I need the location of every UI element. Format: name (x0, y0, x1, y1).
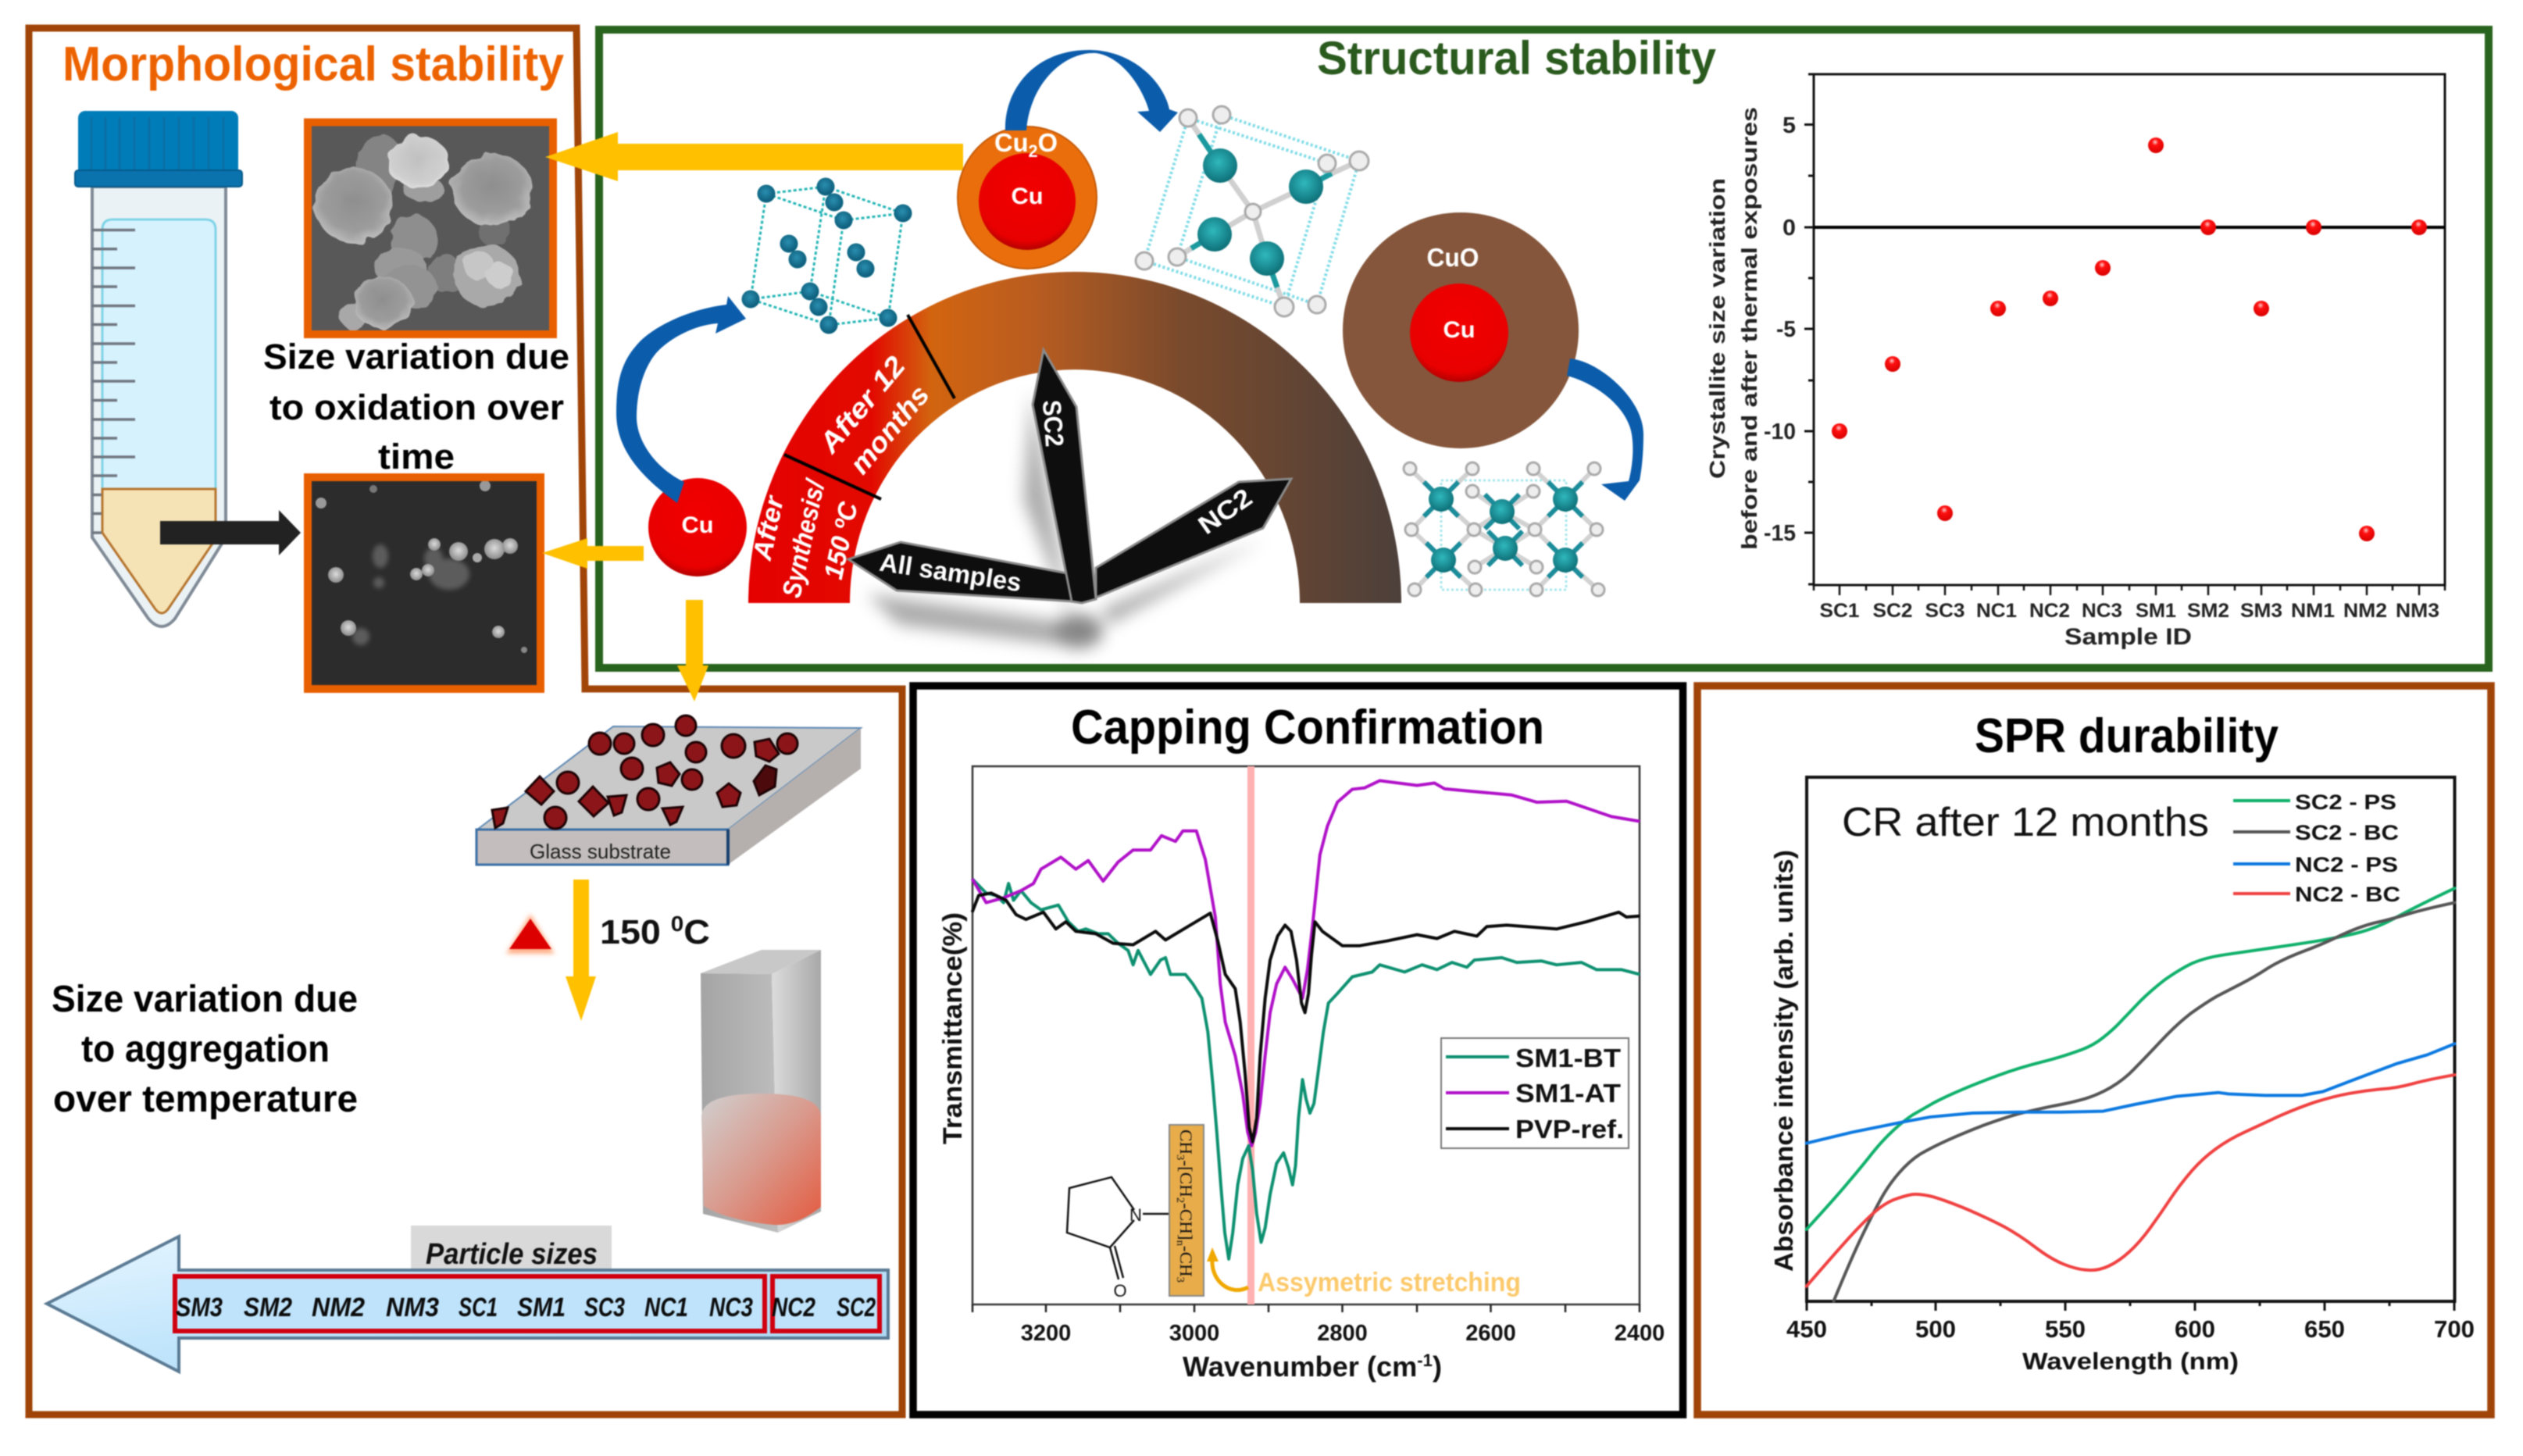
image: SEM oxidised particles (308, 122, 553, 334)
scatter y-axis title (1705, 107, 1761, 550)
panel: SPR durability (1697, 686, 2491, 1415)
label: after synthesis: 150 ºC (819, 499, 864, 582)
scatter x-axis labels: NC2 (2029, 600, 2070, 622)
scatter y-axis labels: -15 (1764, 521, 1796, 546)
chart y-axis title: Transmittance(%) (938, 912, 968, 1144)
image: SEM aggregated particles (308, 477, 541, 689)
panel: capping confirmation (913, 686, 1683, 1415)
chart x-axis labels: 650 (2304, 1315, 2345, 1343)
scatter x-axis title: Sample ID (2064, 624, 2192, 650)
structure: PVP molecule (1067, 1125, 1204, 1301)
scatter y-axis labels (1764, 113, 1796, 546)
chart legend: SC2 - PS (2295, 790, 2396, 814)
chart y-axis title: Absorbance intensity (arb. units) (1769, 850, 1798, 1272)
label: 150 C: C (683, 913, 710, 951)
label: assymetric stretching: Assymetric stretching (1258, 1268, 1521, 1297)
label: particle sizes: Particle sizes (426, 1238, 598, 1271)
structure: PVP molecule: N (1129, 1205, 1142, 1225)
label: 150 C: 150 (600, 913, 657, 951)
chart x-axis labels: 550 (2045, 1315, 2086, 1343)
chart x-axis labels: 450 (1786, 1315, 1827, 1343)
needle: all samples: All samples (878, 548, 1023, 597)
arrow: Cu to SEM image (542, 538, 644, 569)
size ranking labels: NM3 (386, 1293, 439, 1322)
core-shell: Cu2O (958, 127, 1097, 269)
scatter y-axis title: Crystallite size variation (1705, 178, 1729, 479)
core-shell: Cu (648, 478, 747, 576)
size ranking labels: NC3 (709, 1293, 753, 1322)
chart x-axis labels: 3200 (1021, 1321, 1071, 1346)
arrow: Cu to crystal (616, 296, 746, 503)
arrow: assymetric stretching (1207, 1247, 1248, 1290)
text: size variation due to oxidation over time: to oxidation over (269, 387, 564, 427)
chart x-axis labels: 600 (2175, 1315, 2215, 1343)
size ranking labels: NM2 (312, 1293, 365, 1322)
scatter x-axis labels: SM3 (2240, 600, 2282, 622)
arrow: heating 150 C (566, 880, 596, 1021)
crystal: CuO (1404, 462, 1604, 596)
chart legend: NC2 - PS (2295, 853, 2398, 876)
chart: FTIR spectra (938, 766, 1665, 1383)
label: after 12 months: After 12 (812, 350, 912, 459)
structure: PVP molecule: n (1174, 1240, 1186, 1246)
icon: cuvette (701, 950, 821, 1233)
label: particle sizes (411, 1226, 612, 1271)
gauge arc (748, 272, 1401, 603)
crystal: Cu2O (1136, 106, 1369, 316)
scatter y-axis title: before and after thermal exposures (1737, 107, 1761, 550)
scatter x-axis labels: NM1 (2291, 600, 2335, 622)
chart x-axis labels: 500 (1915, 1315, 1956, 1343)
size ranking labels (176, 1293, 876, 1322)
chart legend: SM1-AT (1515, 1079, 1621, 1108)
core-shell: Cu2O: Cu (994, 128, 1029, 157)
chart x-axis labels: 3000 (1169, 1321, 1219, 1346)
needle: NC2 (1096, 479, 1291, 598)
size ranking labels: SM2 (244, 1293, 292, 1322)
label: 150 C: 0 (671, 912, 683, 936)
core-shell: Cu: Cu (681, 512, 714, 538)
size ranking labels: NC1 (644, 1293, 688, 1322)
heading: SPR durability: SPR durability (1975, 709, 2279, 763)
needle: SC2: SC2 (1037, 399, 1069, 448)
scatter y-axis labels: -10 (1764, 419, 1796, 444)
core-shell: Cu2O: O (1038, 128, 1058, 157)
chart x-axis title: ) (1433, 1351, 1442, 1383)
scatter x-axis labels (1820, 600, 2439, 622)
structure: PVP molecule: CH (1176, 1129, 1196, 1154)
scatter points (1832, 137, 2427, 541)
particles (492, 716, 798, 829)
needle: NC2: NC2 (1193, 483, 1258, 540)
scatter x-axis labels: NM2 (2343, 600, 2387, 622)
scatter x-axis labels: SC2 (1873, 600, 1912, 622)
core-shell: CuO (1343, 212, 1579, 448)
chart x-axis labels: 700 (2434, 1315, 2475, 1343)
arrow: Cu to glass substrate (677, 600, 708, 701)
chart legend (1441, 1038, 1629, 1148)
structure: PVP molecule: -CH] (1176, 1203, 1196, 1240)
needle: SC2 (1033, 350, 1096, 603)
core-shell: CuO: CuO (1426, 243, 1479, 272)
crystal: Cu FCC (742, 178, 912, 334)
chart x-axis title: Wavelength (nm) (2022, 1347, 2239, 1375)
arrow: Cu2O to SEM image (545, 132, 963, 181)
text: size variation due to aggregation over temperature: Size variation due (52, 979, 358, 1020)
size ranking labels: SC3 (584, 1293, 625, 1322)
core-shell: Cu2O: Cu (1011, 184, 1044, 209)
core-shell: Cu2O: 2 (1029, 141, 1038, 161)
scatter x-axis labels: SC1 (1820, 600, 1860, 622)
size ranking labels: SM3 (176, 1293, 223, 1322)
scatter y-axis labels: -5 (1776, 317, 1796, 342)
chart legend: SM1-BT (1515, 1044, 1621, 1072)
scatter x-axis labels: NC3 (2082, 600, 2122, 622)
heading: morphological stability: Morphological stability (62, 37, 564, 91)
chart annotation: CR after 12 months (1842, 800, 2209, 845)
arrow: CuO to crystal (1567, 359, 1643, 501)
chart x-axis labels: 2400 (1615, 1321, 1665, 1346)
illustration: glass substrate with particles (476, 716, 861, 865)
scatter y-axis labels: 0 (1783, 216, 1796, 241)
text: size variation due to aggregation over temperature (52, 979, 358, 1120)
structure: PVP molecule: -CH (1176, 1246, 1196, 1277)
chart legend (2233, 790, 2400, 906)
structure: PVP molecule: O (1113, 1281, 1127, 1301)
label: after synthesis (748, 476, 864, 600)
chart legend: NC2 - BC (2295, 883, 2400, 906)
scatter x-axis labels: SM1 (2136, 600, 2176, 622)
text: size variation due to oxidation over time: time (378, 437, 455, 476)
size ranking labels: NC2 (772, 1293, 815, 1322)
chart: crystallite size variation scatter (1705, 74, 2445, 650)
label: after synthesis: After (748, 492, 790, 563)
chart legend: SC2 - BC (2295, 821, 2399, 844)
heading: capping confirmation: Capping Confirmation (1071, 701, 1544, 755)
chart legend: PVP-ref. (1515, 1115, 1624, 1144)
text: size variation due to aggregation over temperature: over temperature (53, 1079, 358, 1120)
chart x-axis labels (1786, 1315, 2475, 1343)
icon: heat triangle (506, 914, 555, 954)
chart x-axis labels: 2600 (1465, 1321, 1516, 1346)
core-shell: CuO: Cu (1443, 317, 1475, 343)
structure: PVP molecule: 3 (1174, 1154, 1186, 1160)
text: size variation due to oxidation over time: Size variation due (263, 337, 569, 376)
size ranking labels: SM1 (517, 1293, 566, 1322)
text: size variation due to aggregation over temperature: to aggregation (81, 1029, 330, 1070)
chart x-axis title: Wavenumber (cm (1183, 1351, 1416, 1383)
chart x-axis labels (1021, 1321, 1665, 1346)
scatter x-axis labels: NC1 (1976, 600, 2017, 622)
arrow: particle size ranking (47, 1237, 888, 1372)
label: glass substrate: Glass substrate (530, 840, 671, 863)
structure: PVP molecule: 3 (1174, 1277, 1186, 1283)
arrow: tube to SEM image (160, 510, 301, 555)
structure: PVP molecule: -[CH (1176, 1160, 1196, 1197)
arrow: Cu2O to crystal (1005, 50, 1178, 132)
scatter x-axis labels: NM3 (2396, 600, 2439, 622)
label: after 12 months (812, 350, 936, 480)
needle shadows (867, 391, 1265, 648)
label: after 12 months: months (844, 379, 936, 480)
chart x-axis labels: 2800 (1317, 1321, 1368, 1346)
heading: structural stability: Structural stability (1317, 32, 1717, 84)
label: after synthesis: Synthesis/ (777, 476, 831, 600)
chart: absorbance spectra (1769, 777, 2475, 1375)
needle: all samples (848, 542, 1075, 601)
scatter y-axis labels: 5 (1783, 113, 1796, 138)
structure: PVP molecule: 2 (1174, 1197, 1186, 1203)
text: size variation due to oxidation over time (263, 337, 569, 476)
size ranking labels: SC1 (459, 1293, 498, 1322)
chart x-axis title: -1 (1417, 1351, 1433, 1370)
icon: centrifuge tube (75, 111, 242, 626)
size ranking labels: SC2 (837, 1293, 876, 1322)
scatter x-axis labels: SM2 (2187, 600, 2229, 622)
scatter x-axis labels: SC3 (1925, 600, 1965, 622)
